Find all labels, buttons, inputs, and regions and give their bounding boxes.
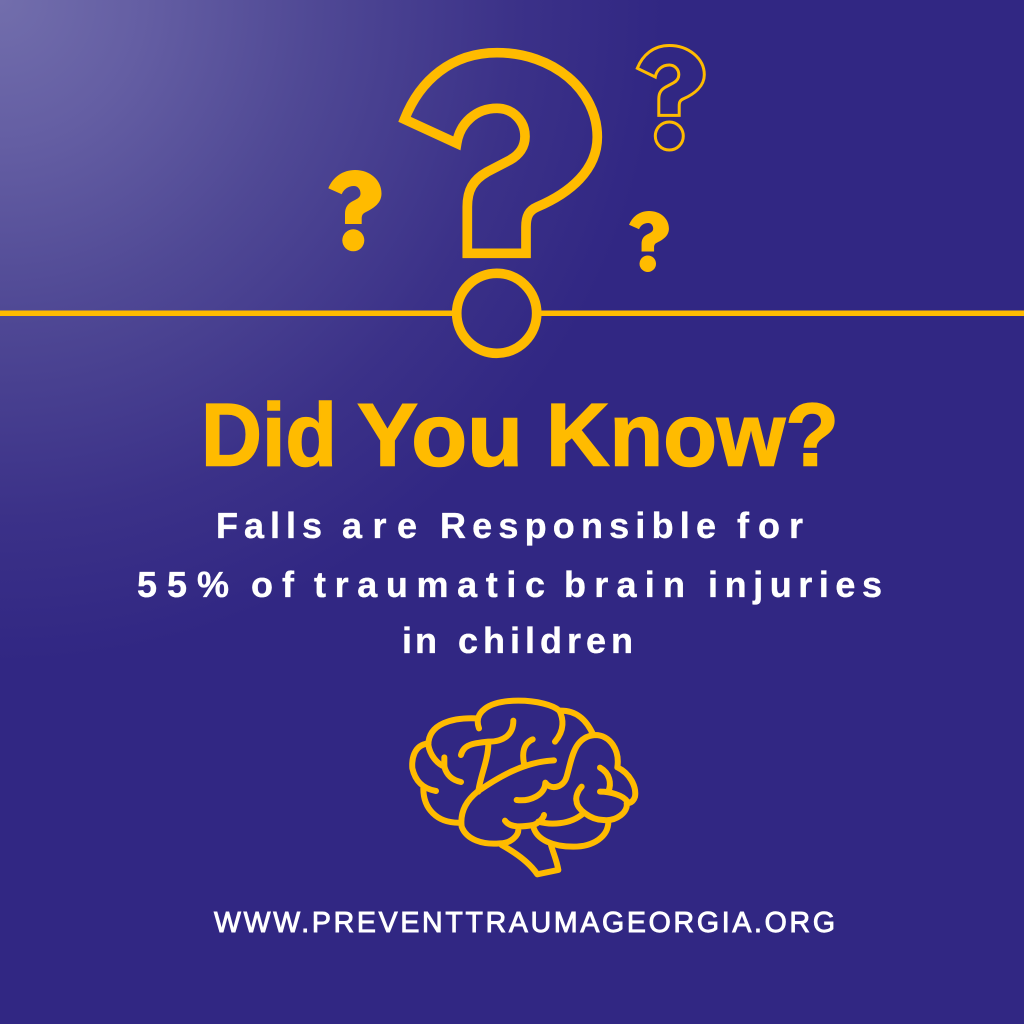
text block: fall statistic: Responsible (440, 505, 716, 546)
text block: fall statistic: for (737, 505, 803, 546)
text block: fall statistic (137, 505, 882, 661)
text block: fall statistic: of (251, 564, 295, 605)
heading: Know? (546, 384, 839, 484)
text block: fall statistic: injuries (708, 564, 882, 605)
text block: fall statistic: brain (564, 564, 685, 605)
horizontal line (0, 310, 1024, 316)
heading: You (357, 384, 523, 484)
icon: brain (412, 701, 635, 874)
website url: WWW.PREVENTTRAUMAGEORGIA.ORG (214, 907, 835, 939)
icon: large outlined question mark (404, 53, 597, 353)
icon: small outlined question mark (637, 46, 704, 150)
text block: fall statistic: 55% (137, 564, 229, 605)
text block: fall statistic: children (458, 620, 633, 661)
text block: fall statistic: in (402, 620, 437, 661)
text block: fall statistic: traumatic (314, 564, 545, 605)
text block: fall statistic: are (342, 505, 417, 546)
heading (201, 384, 839, 484)
icon: filled question mark left (328, 170, 382, 251)
text block: fall statistic: Falls (216, 505, 322, 546)
icon: filled question mark right (629, 211, 669, 272)
heading: Did (201, 384, 337, 484)
